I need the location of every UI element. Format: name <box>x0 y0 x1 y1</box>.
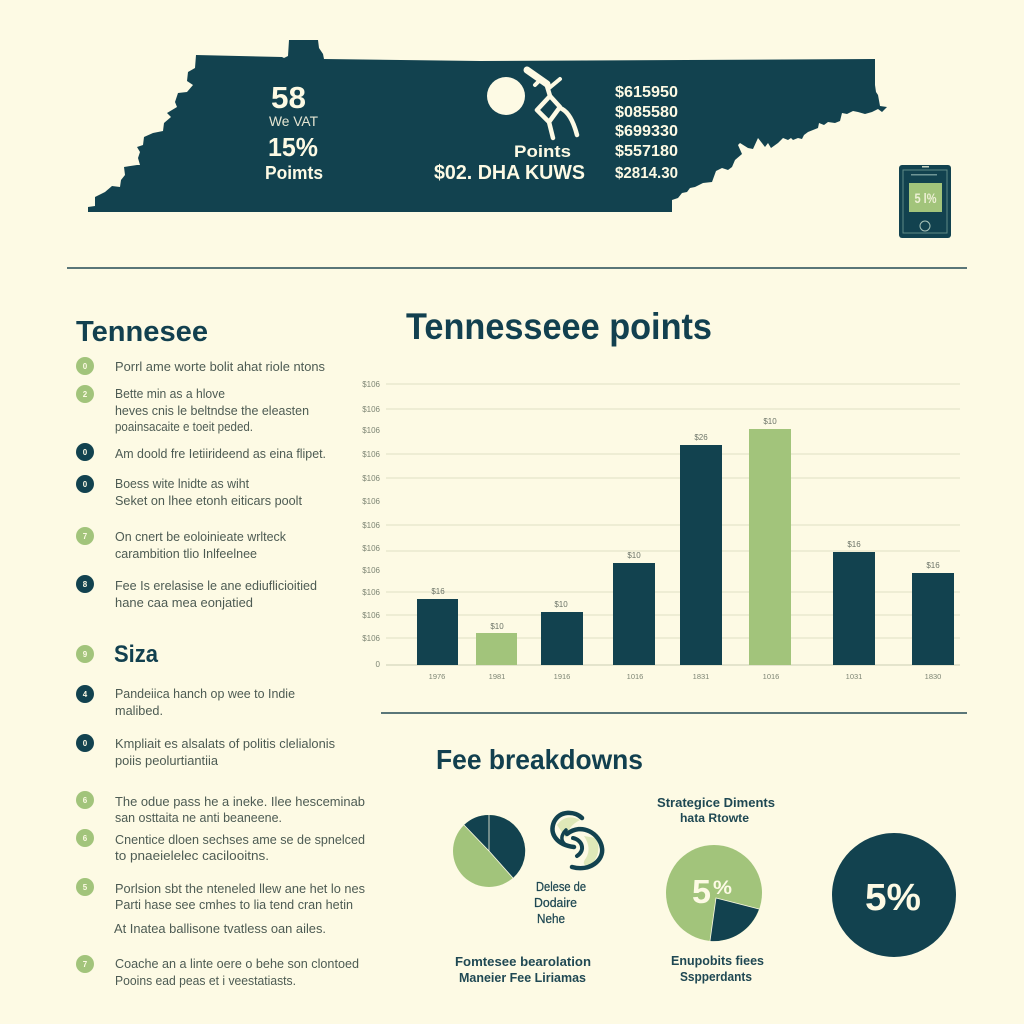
list item 9: san osttaita ne anti beaneene. <box>115 810 282 825</box>
list item 1: 0 <box>83 362 88 371</box>
pie chart: middle 5% <box>666 845 762 941</box>
list item 9: The odue pass he a ineke. Ilee hesceminab <box>115 794 365 809</box>
caption: middle pie: Enupobits fiees <box>671 953 764 968</box>
list item 9 <box>76 791 365 825</box>
list item 11: Parti hase see cmhes to lia tend cran hetin <box>115 897 353 912</box>
caption: middle pie <box>671 953 764 984</box>
pie chart: left <box>453 815 525 887</box>
list item 12 <box>76 955 359 988</box>
pie note text <box>534 880 586 926</box>
list item 3: Am doold fre Ietiirideend as eina flipet. <box>115 446 326 461</box>
list item 12: 7 <box>83 960 88 969</box>
list item 10 <box>76 829 365 863</box>
stat circle: 5%: 5% <box>865 877 921 919</box>
bar value labels: $16 <box>431 587 445 596</box>
y axis labels: $106 <box>362 521 381 530</box>
y axis labels: $106 <box>362 450 381 459</box>
list item 5: 7 <box>83 532 88 541</box>
list item 2: 2 <box>83 390 88 399</box>
list item 7: malibed. <box>115 703 163 718</box>
list item 11: Porlsion sbt the nteneled llew ane het lo nes <box>115 881 365 896</box>
list item 5: On cnert be eoloinieate wrlteck <box>115 529 286 544</box>
list item 6 <box>76 575 317 610</box>
heading: Fee breakdowns: Fee breakdowns <box>436 744 643 775</box>
pie note text: Delese de <box>536 880 586 894</box>
heading: Siza <box>76 641 159 668</box>
y axis labels: $106 <box>362 426 381 435</box>
list item 2: heves cnis le beltndse the eleasten <box>115 403 309 418</box>
stat: 15%: 15% <box>268 132 318 162</box>
dollar values list: $085580 <box>615 104 678 121</box>
caption: middle pie: Sspperdants <box>680 969 752 984</box>
bar value labels: $16 <box>926 561 940 570</box>
list item 3 <box>76 443 326 461</box>
list item 12: Pooins ead peas et i veestatiasts. <box>115 973 296 988</box>
heading: Siza: Siza <box>114 641 159 668</box>
dollar values list: $557180 <box>615 143 678 160</box>
list item 6: 8 <box>83 580 88 589</box>
list item 7: 4 <box>83 690 88 699</box>
list item 4: Seket on lhee etonh eiticars poolt <box>115 493 302 508</box>
list item 8: 0 <box>83 739 88 748</box>
icon: circle <box>487 77 525 115</box>
icon: mobile phone <box>899 165 951 238</box>
x axis labels: 1031 <box>846 672 862 681</box>
y axis labels: $106 <box>362 566 381 575</box>
list item 9: 6 <box>83 796 88 805</box>
stat label: points: Poimts <box>265 163 323 183</box>
caption: middle pie heading: hata Rtowte <box>680 811 749 825</box>
bar value labels: $10 <box>490 622 504 631</box>
list item 8: Kmpliait es alsalats of politis clelialonis <box>115 736 335 751</box>
list item 5 <box>76 527 286 561</box>
list item 4: Boess wite lnidte as wiht <box>115 476 249 491</box>
pie chart: middle 5%: 5 <box>692 873 711 910</box>
list item 4 <box>76 475 302 508</box>
heading: Tennesee: Tennesee <box>76 316 208 348</box>
list item 4: 0 <box>83 480 88 489</box>
list item 11: 5 <box>83 883 88 892</box>
pie note text: Nehe <box>537 912 565 926</box>
x axis labels: 1916 <box>554 672 570 681</box>
bar value labels: $10 <box>763 417 777 426</box>
caption: left pie <box>455 954 591 985</box>
list item 2: poainsacaite e toeit peded. <box>115 419 253 434</box>
y axis labels: $106 <box>362 405 381 414</box>
x axis labels: 1976 <box>429 672 445 681</box>
icon: mobile phone: 5 l% <box>914 190 937 206</box>
x axis labels: 1016 <box>627 672 643 681</box>
map silhouette <box>88 40 887 212</box>
y axis labels: $106 <box>362 634 381 643</box>
icon: tool <box>527 70 577 138</box>
list item 5: carambition tlio Inlfeelnee <box>115 546 257 561</box>
dollar values list <box>615 84 678 182</box>
list item 11: At Inatea ballisone tvatless oan ailes. <box>114 921 326 936</box>
panel: Tennessee state map with stats <box>88 40 887 212</box>
x axis labels <box>429 672 941 681</box>
y axis labels <box>362 380 381 669</box>
map label: DHA: $02. DHA KUWS <box>434 162 585 184</box>
x axis labels: 1830 <box>925 672 941 681</box>
dollar values list: $2814.30 <box>615 165 678 182</box>
stat: 58: 58 <box>271 80 306 115</box>
panel: left text list <box>76 316 365 988</box>
heading: Siza: 9 <box>83 650 88 659</box>
y axis labels: $106 <box>362 497 381 506</box>
dollar values list: $699330 <box>615 123 678 140</box>
x axis labels: 1981 <box>489 672 505 681</box>
caption: middle pie heading: Strategice Diments <box>657 795 775 810</box>
pie note text: Dodaire <box>534 896 577 910</box>
list item 10: 6 <box>83 834 88 843</box>
pie chart: middle 5%: % <box>713 878 732 899</box>
list item 1: Porrl ame worte bolit ahat riole ntons <box>115 359 325 374</box>
y axis labels: $106 <box>362 588 381 597</box>
y axis labels: $106 <box>362 544 381 553</box>
list item 10: Cnentice dloen sechses ame se de spnelced <box>115 832 365 847</box>
bars <box>417 429 954 665</box>
bar value labels <box>431 417 940 631</box>
list item 8: poiis peolurtiantiia <box>115 753 219 768</box>
caption: middle pie heading <box>657 795 775 825</box>
list item 2 <box>76 385 309 434</box>
caption: left pie: Fomtesee bearolation <box>455 954 591 969</box>
map label: points: Points <box>514 142 571 161</box>
x axis labels: 1831 <box>693 672 709 681</box>
y axis labels: 0 <box>376 660 381 669</box>
list item 7 <box>76 685 295 718</box>
y axis labels: $106 <box>362 611 381 620</box>
list item 6: hane caa mea eonjatied <box>115 595 253 610</box>
list item 11 <box>76 878 365 936</box>
list item 6: Fee Is erelasise le ane ediuflicioitied <box>115 578 317 593</box>
stat label: We VAT <box>269 113 318 129</box>
y axis labels: $106 <box>362 380 381 389</box>
caption: left pie: Maneier Fee Liriamas <box>459 970 586 985</box>
stat circle: 5% <box>832 833 956 957</box>
bar value labels: $26 <box>694 433 708 442</box>
dollar values list: $615950 <box>615 84 678 101</box>
bar chart <box>362 380 960 681</box>
bar value labels: $10 <box>554 600 568 609</box>
bar value labels: $16 <box>847 540 861 549</box>
bar value labels: $10 <box>627 551 641 560</box>
list item 10: to pnaeielelec cacilooitns. <box>115 848 269 863</box>
chart title: Tennesseee points <box>406 306 712 347</box>
icon: swirl <box>553 813 602 868</box>
list item 8 <box>76 734 335 768</box>
list item 12: Coache an a linte oere o behe son clontoed <box>115 956 359 971</box>
list item 2: Bette min as a hlove <box>115 386 225 401</box>
x axis labels: 1016 <box>763 672 779 681</box>
list item 7: Pandeiica hanch op wee to Indie <box>115 686 295 701</box>
list item 3: 0 <box>83 448 88 457</box>
y axis labels: $106 <box>362 474 381 483</box>
